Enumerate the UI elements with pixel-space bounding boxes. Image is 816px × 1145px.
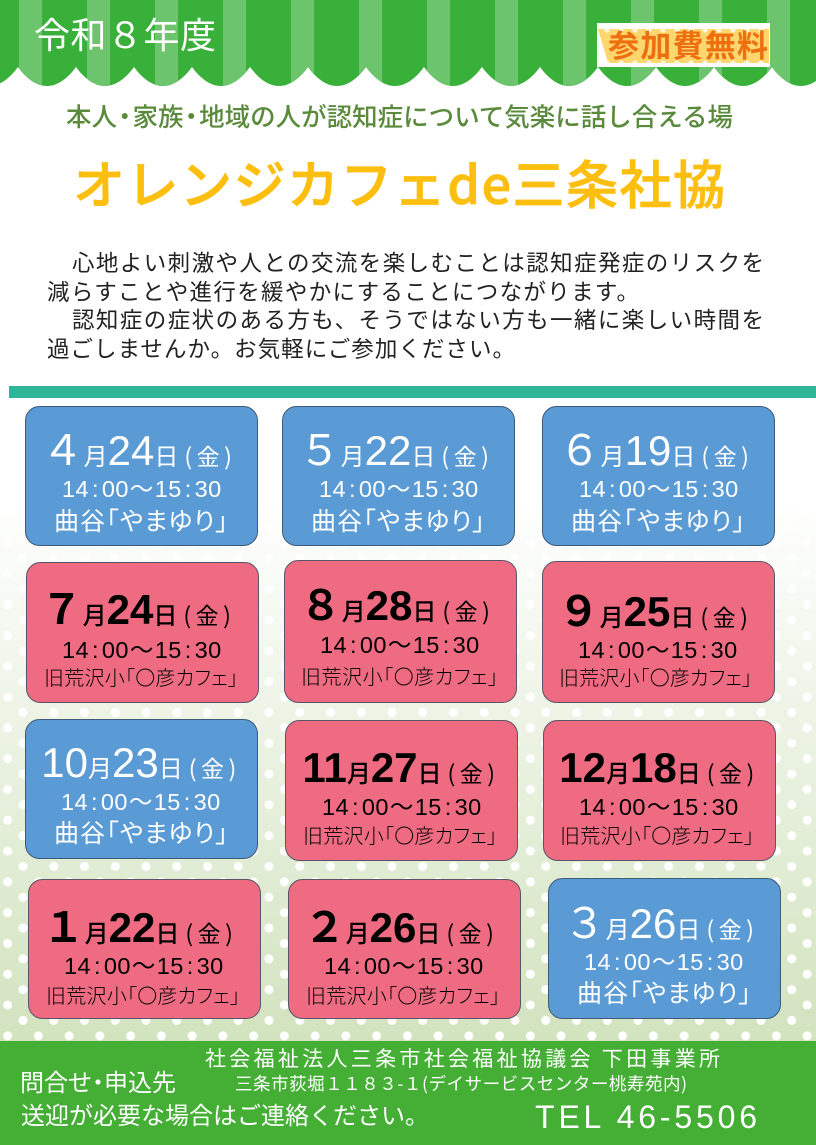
- address: 三条市荻堀１１８３-１(デイサービスセンター桃寿苑内): [235, 1071, 687, 1096]
- telephone: TEL 46-5506: [535, 1099, 757, 1135]
- card: March: ３月26日 (金): [564, 890, 758, 951]
- card: January: 旧荒沢小「〇彦カフェ」: [46, 980, 240, 1009]
- card: February: 旧荒沢小「〇彦カフェ」: [306, 980, 500, 1009]
- contact label: 問合せ・申込先: [20, 1063, 176, 1098]
- card: July: [26, 562, 258, 702]
- card: May: ５月22日 (金): [299, 417, 493, 478]
- card: May: [282, 406, 514, 546]
- card: April: [26, 406, 258, 546]
- card: April: ４月24日 (金): [42, 417, 236, 478]
- fiscal year label: 令和８年度: [34, 7, 216, 59]
- card: October: 曲谷「やまゆり」: [54, 814, 228, 850]
- card: June: [542, 406, 774, 546]
- card: July: 14:00〜15:30: [62, 637, 222, 663]
- card: November: 14:00〜15:30: [322, 794, 482, 820]
- card: March: 14:00〜15:30: [584, 949, 744, 975]
- card: October: [26, 720, 258, 858]
- card: August: 14:00〜15:30: [320, 632, 480, 658]
- card: January: 14:00〜15:30: [64, 953, 224, 979]
- card: April: 14:00〜15:30: [62, 476, 222, 502]
- card: November: [286, 720, 518, 860]
- card: September: 14:00〜15:30: [578, 637, 738, 663]
- card: January: [28, 880, 260, 1018]
- card: December: 旧荒沢小「〇彦カフェ」: [560, 820, 754, 849]
- card: September: ９月25日 (金): [558, 578, 752, 639]
- card: July: 旧荒沢小「〇彦カフェ」: [44, 662, 238, 691]
- card: February: ２月26日 (金): [304, 894, 498, 955]
- card: April: 曲谷「やまゆり」: [54, 502, 228, 538]
- card: August: 旧荒沢小「〇彦カフェ」: [301, 661, 498, 690]
- card: September: [542, 562, 774, 702]
- card: March: 曲谷「やまゆり」: [577, 974, 751, 1010]
- badge: free admission: 参加費無料: [608, 21, 768, 66]
- card: November: 11月27日 (金): [302, 744, 500, 791]
- card: June: ６月19日 (金): [559, 417, 753, 478]
- gradient dotted background: [0, 500, 816, 1041]
- card: October: 10月23日 (金): [41, 739, 241, 786]
- intro text: 心地よい刺激や人との交流を楽しむことは認知症発症のリスクを: [72, 246, 764, 278]
- card: May: 曲谷「やまゆり」: [311, 502, 485, 538]
- teal divider: [9, 386, 816, 398]
- card: January: １月22日 (金): [43, 894, 237, 955]
- card: December: 12月18日 (金): [559, 744, 759, 791]
- card: November: 旧荒沢小「〇彦カフェ」: [303, 820, 497, 849]
- transport note: 送迎が必要な場合はご連絡ください。: [21, 1096, 429, 1131]
- card: December: 14:00〜15:30: [579, 794, 739, 820]
- intro text: 過ごしませんか。お気軽にご参加ください。: [47, 332, 515, 364]
- card: August: ８月28日 (金): [300, 572, 494, 633]
- card: October: 14:00〜15:30: [61, 789, 221, 815]
- awning header: [0, 0, 816, 90]
- card: March: [548, 878, 780, 1018]
- intro text: 認知症の症状のある方も、そうではない方も一緒に楽しい時間を: [72, 303, 764, 335]
- main title: オレンジカフェde三条社協: [73, 144, 725, 219]
- card: February: 14:00〜15:30: [324, 953, 484, 979]
- card: May: 14:00〜15:30: [319, 476, 479, 502]
- card: June: 曲谷「やまゆり」: [571, 502, 745, 538]
- subtitle: 本人・家族・地域の人が認知症について気楽に話し合える場: [66, 97, 733, 134]
- intro text: 減らすことや進行を緩やかにすることにつながります。: [47, 275, 639, 307]
- card: August: [284, 560, 516, 702]
- intro text: [47, 246, 764, 364]
- organisation name: 社会福祉法人三条市社会福祉協議会 下田事業所: [205, 1043, 720, 1073]
- card: September: 旧荒沢小「〇彦カフェ」: [559, 662, 752, 691]
- card: February: [288, 880, 520, 1018]
- card: December: [544, 720, 776, 860]
- footer band: [0, 1041, 816, 1145]
- card: June: 14:00〜15:30: [579, 476, 739, 502]
- card: July: ７月24日 (金): [41, 576, 235, 637]
